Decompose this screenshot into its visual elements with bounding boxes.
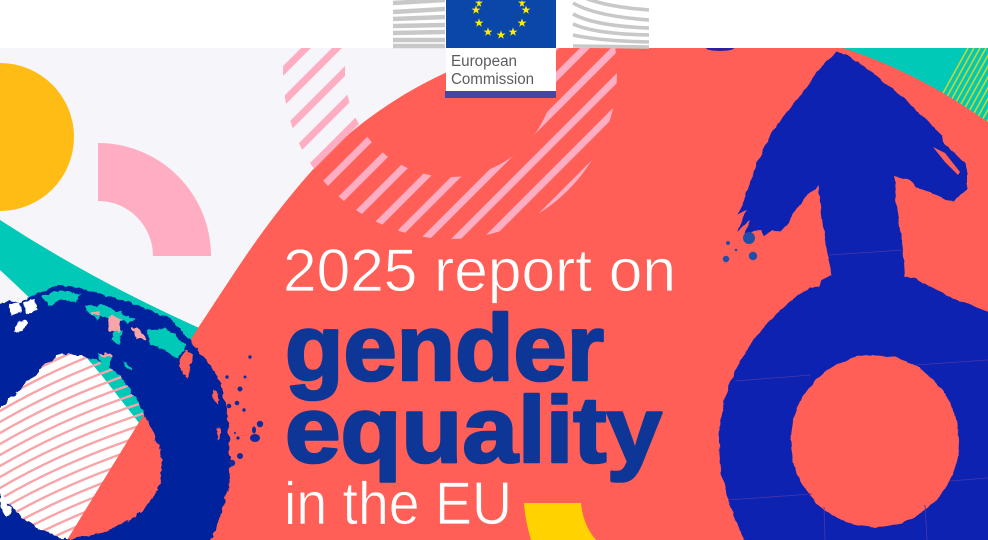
ink splatter dots near ring [225,355,263,466]
title: gender: gender [285,295,604,400]
pink hatched arc [283,48,617,239]
ink splatter dots near arrow [723,232,757,262]
male symbol arrow and ring [719,51,988,540]
header white strip [0,0,988,48]
title line: 2025 report on: 2025 report on [283,237,676,304]
EU stars [472,0,530,39]
coral flecks on the ring [179,350,220,440]
logo: European Commission [445,0,556,98]
female symbol ring, brush texture [0,285,230,540]
white flecks on the ring [0,299,37,518]
logo: building left [393,0,445,46]
small dark shape at top edge [706,45,734,51]
logo: building right [573,0,649,47]
coral sliver in ring [835,357,859,367]
teal corner top right [830,40,988,140]
pink streaks on the ring [90,311,145,357]
coral sliver in arrowhead [933,147,960,175]
logo text [451,53,534,88]
white disc with curved stripes and teal band [0,220,215,540]
icon: pink quarter ring [98,143,211,256]
title line: in the EU: in the EU [284,470,512,537]
yellow quarter ring [524,503,596,540]
teal flecks on the ring [42,290,187,371]
faint crack lines [728,250,988,540]
title: equality: equality [285,377,662,482]
icon: yellow circle [0,63,74,211]
logo text: Commission [451,71,534,88]
logo text: European [451,53,517,70]
